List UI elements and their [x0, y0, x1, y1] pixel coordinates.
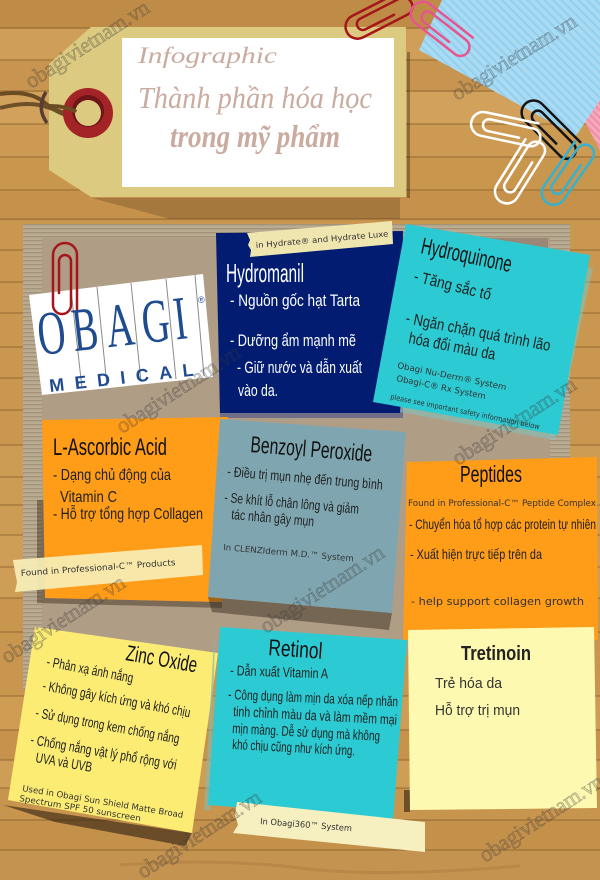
bullet list: - Ngăn chặn quá trình lão [404, 310, 552, 355]
MEDICAL wordmark: MEDICAL [48, 360, 195, 396]
tag eyelet [48, 88, 113, 138]
tag string [0, 92, 82, 123]
watermarks: obagivietnam.vn [447, 371, 581, 470]
bullet list [228, 662, 398, 758]
bullet list: - Sử dụng trong kem chống nắng [34, 704, 181, 747]
tape: Hydrate: in Hydrate® and Hydrate Luxe [255, 229, 389, 250]
title text: Thành phần hóa học [138, 80, 372, 115]
watermarks: obagivietnam.vn [111, 339, 245, 438]
bullet list: UVA và UVB [34, 749, 93, 775]
paperclip on logo [53, 243, 77, 314]
bullet list [224, 463, 384, 529]
panel: Tretinoin [404, 627, 597, 812]
panel: Peptides: - help support collagen growth [411, 595, 584, 608]
product: Found in Professional-C™ Peptide Complex [408, 499, 596, 509]
bullet list: mịn màng. Dễ sử dụng mà không [232, 720, 380, 744]
bullet list: - Dẫn xuất Vitamin A [230, 662, 329, 681]
panel: Peptides [403, 457, 598, 640]
heading: L-Ascorbic Acid [53, 434, 167, 461]
logo card [29, 274, 213, 396]
bullet list: - Công dụng làm mịn da xóa nếp nhăn [228, 686, 398, 709]
bullet list [29, 653, 192, 775]
panel: Hydroquinone [373, 224, 593, 440]
bullet list: - Điều trị mụn nhẹ đến trung bình [227, 463, 384, 493]
paperclip: red top [341, 0, 416, 43]
heading: Peptides [460, 461, 522, 487]
bullet list: - Phản xạ ánh nắng [45, 653, 135, 686]
bullet list: - Giữ nước và dẫn xuất [237, 358, 362, 377]
tape: Obagi360 [233, 802, 425, 852]
bullet list: - Dạng chủ động của [53, 467, 171, 484]
tape: Hydrate [247, 221, 393, 257]
panel: Hydromanil [216, 221, 405, 418]
watermarks: obagivietnam.vn [446, 8, 581, 105]
products [390, 361, 540, 431]
heading: Retinol [268, 634, 323, 664]
registered mark: ® [198, 295, 205, 305]
bullet list: - Không gây kích ứng và khó chịu [41, 677, 192, 720]
bullet list [435, 675, 520, 719]
products: Obagi-C® Rx System [395, 374, 487, 402]
heading: Tretinoin [461, 643, 531, 665]
title text: trong mỹ phẩm [170, 118, 340, 154]
heading: Zinc Oxide [124, 640, 199, 677]
paperclip: pink [406, 0, 477, 60]
panel: Zinc Oxide [3, 627, 218, 846]
bullet list: - Dưỡng ẩm mạnh mẽ [230, 331, 356, 350]
panel: Benzoyl Peroxide [208, 419, 406, 630]
bullet list: hóa đổi màu da [407, 329, 497, 364]
product: Spectrum SPF 50 sunscreen [19, 794, 141, 824]
paperclip: white diagonal [490, 135, 548, 208]
bullet list: - Xuất hiện trực tiếp trên da [410, 546, 542, 562]
pink note corner [585, 98, 600, 150]
bullet list [230, 291, 362, 400]
bullet list [409, 516, 596, 562]
panel: L-Ascorbic Acid [13, 417, 228, 608]
title tag [0, 27, 410, 219]
tape: Obagi360: In Obagi360™ System [260, 817, 352, 834]
bullet list: - Chống nắng vật lý phổ rộng với [29, 731, 178, 773]
title text: Infographic [137, 43, 277, 68]
title text [137, 43, 372, 154]
watermarks: obagivietnam.vn [255, 539, 389, 638]
bullet list: - Tăng sắc tố [412, 266, 493, 304]
heading: Hydroquinone [419, 232, 514, 277]
paperclip: white horizontal [469, 110, 543, 148]
watermarks: obagivietnam.vn [0, 569, 130, 668]
bullet list: khó chịu cũng như kích ứng. [232, 736, 356, 758]
bullet list: - Nguồn gốc hạt Tarta [230, 291, 360, 310]
tape: Found in Professional-C: Found in Professional-C™ Products [21, 558, 176, 579]
paperclip: blue [537, 138, 598, 210]
bullet list: vào da. [238, 381, 278, 400]
bullet list: Hỗ trợ trị mụn [435, 702, 520, 719]
bullet list [53, 467, 203, 523]
bullet list: tinh chỉnh màu da và làm mềm mại [233, 703, 397, 728]
bullet list: - Hỗ trợ tổng hợp Collagen [53, 504, 203, 523]
products: please see important safety information below [390, 392, 540, 431]
cardboard board [23, 224, 570, 690]
tape: Found in Professional-C [13, 545, 203, 592]
bullet list: Trẻ hóa da [435, 675, 503, 692]
bullet list: Vitamin C [60, 489, 117, 506]
product: In CLENZIderm M.D.™ System [223, 543, 354, 564]
products: Obagi Nu-Derm® System [396, 361, 507, 393]
panel: Retinol [204, 627, 425, 852]
blue striped note [419, 0, 600, 136]
bullet list [404, 266, 552, 364]
heading: Hydromanil [226, 258, 304, 288]
paperclip: black [517, 95, 584, 163]
heading: Benzoyl Peroxide [250, 431, 373, 467]
bullet list: - Se khít lỗ chân lông và giảm [224, 489, 360, 517]
bullet list: tác nhân gây mụn [231, 506, 315, 529]
OBAGI wordmark: OBAGI [34, 284, 190, 369]
product: Used in Obagi Sun Shield Matte Broad [22, 784, 184, 821]
